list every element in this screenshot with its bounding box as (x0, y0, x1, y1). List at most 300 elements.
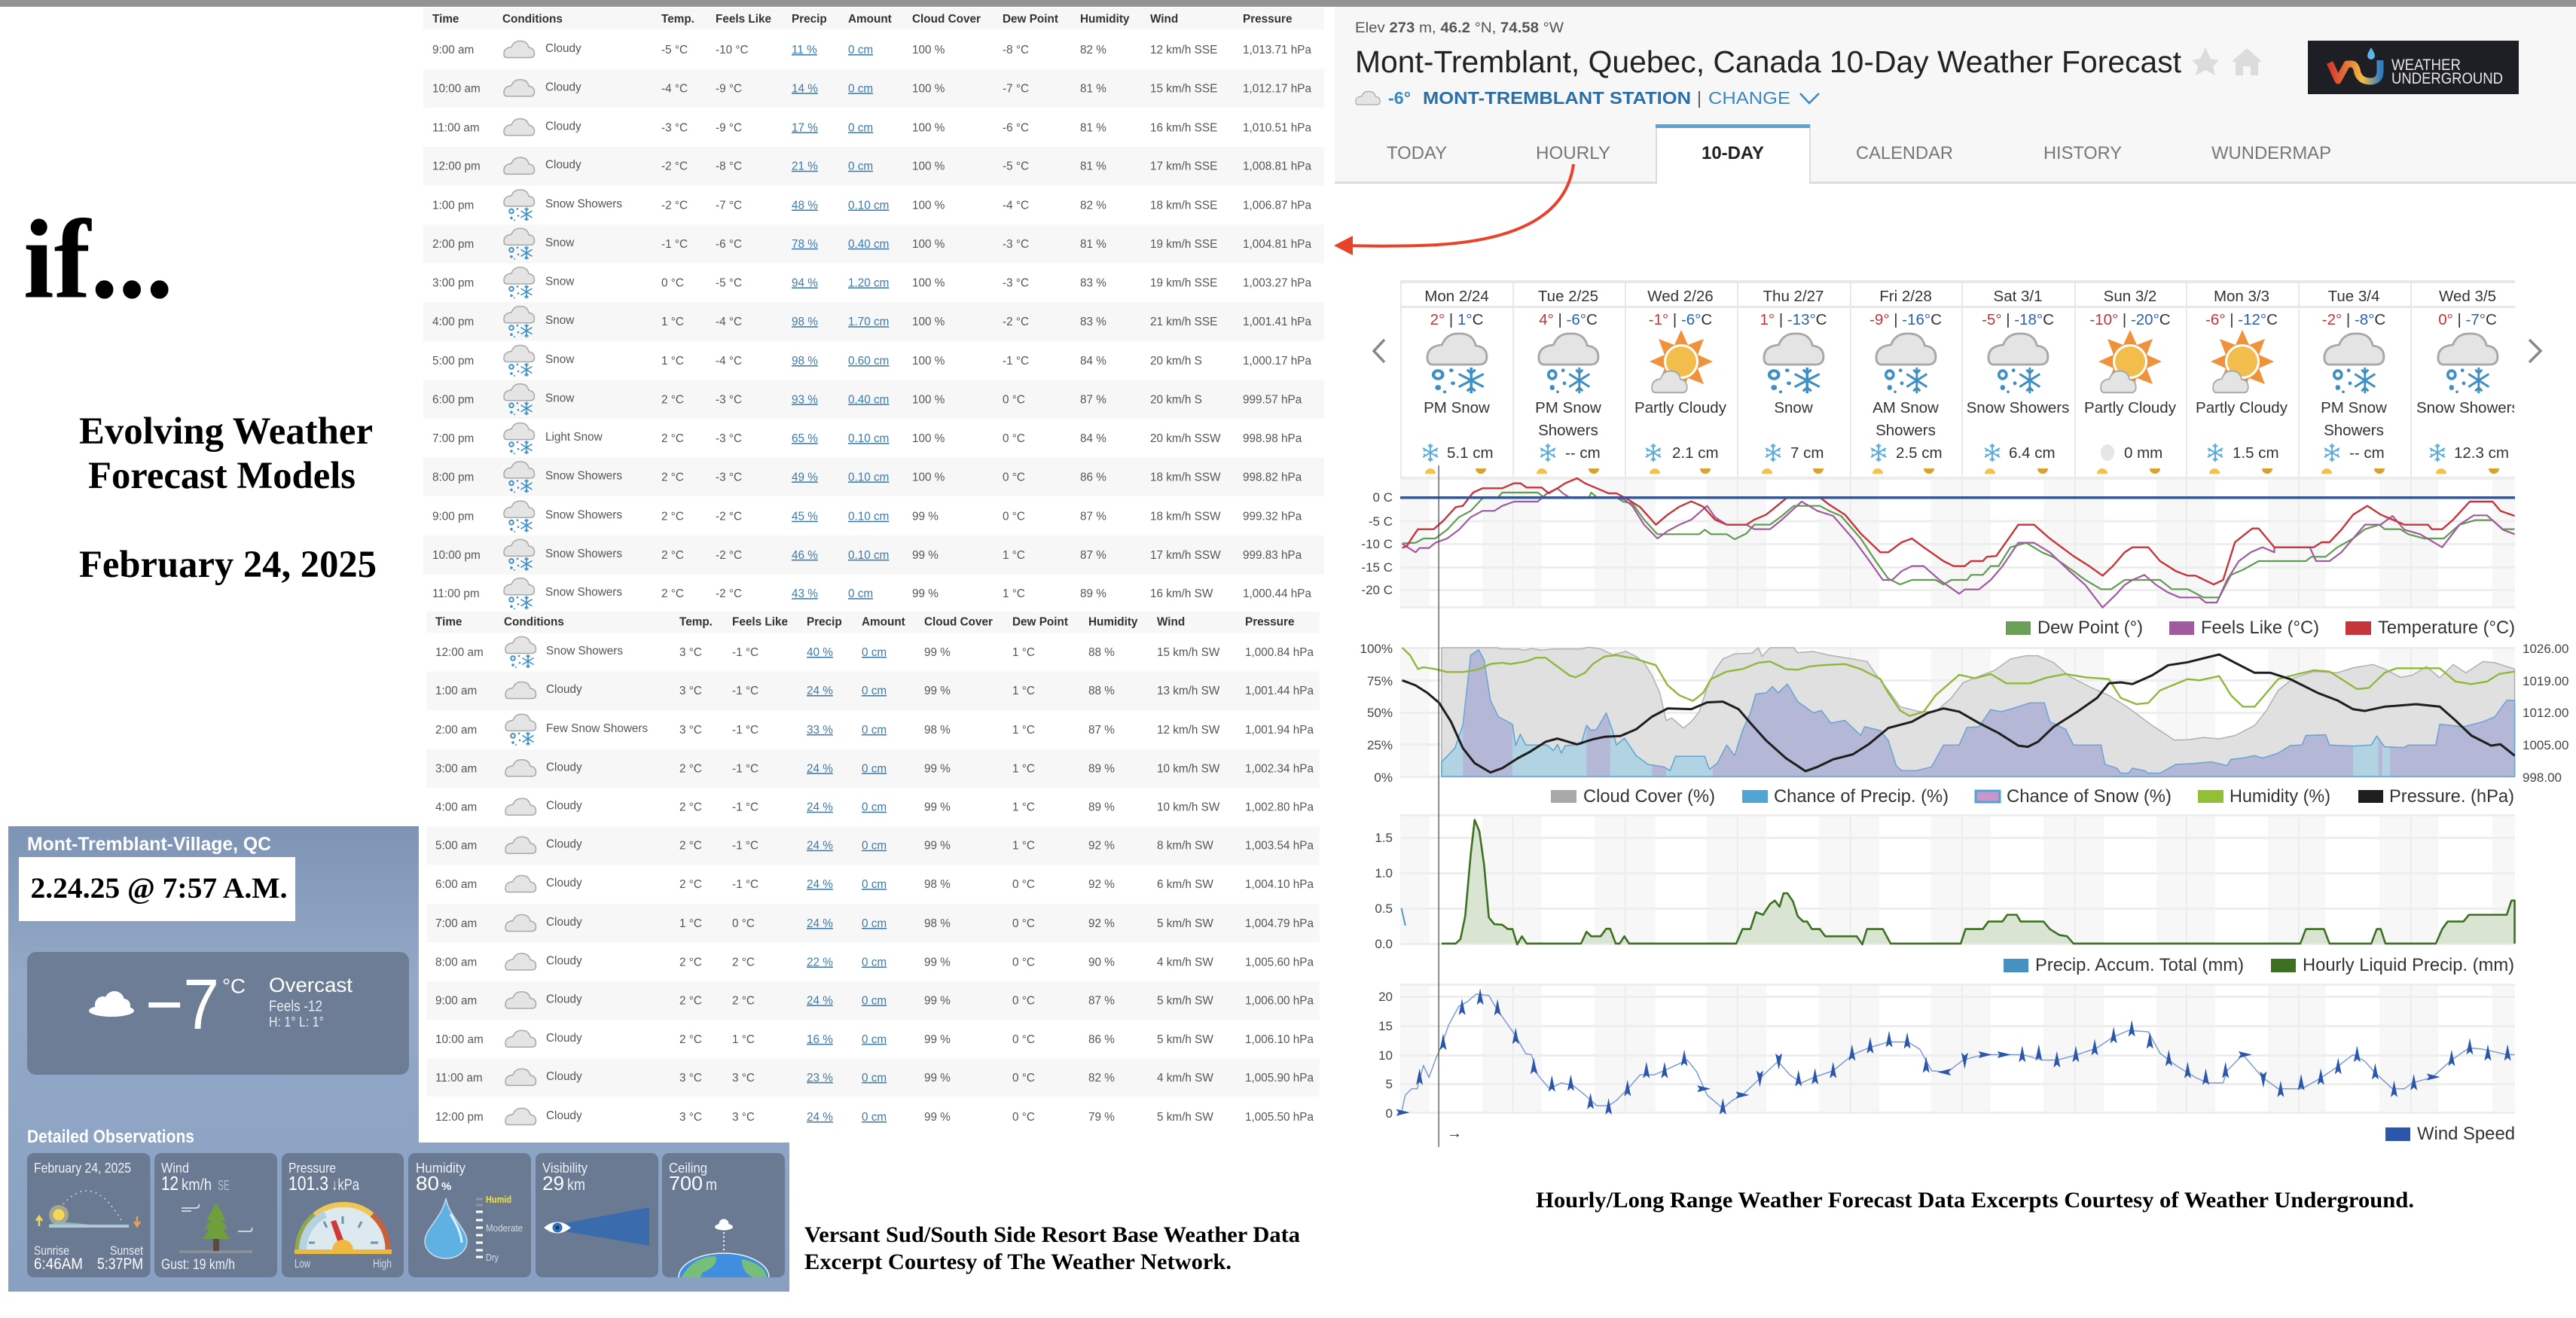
row 5:00 am: Cloudy (546, 838, 582, 851)
row 10:00 am: 0 cm (848, 82, 873, 95)
row 11:00 am: -6 °C (1003, 121, 1029, 134)
row 8:00 pm: 86 % (1080, 471, 1106, 484)
navigation tabs: TODAY (1387, 143, 1447, 163)
row 8:00 pm: 8:00 pm (432, 471, 474, 484)
legend (1551, 786, 2514, 807)
previous chevron (1374, 340, 1384, 362)
hourly table: day two (426, 612, 1320, 1125)
row 11:00 pm: 0 cm (848, 587, 873, 600)
row 8:00 pm (432, 462, 1302, 493)
row 10:00 pm: 0.10 cm (848, 549, 889, 562)
day: Wed 2/26 (1634, 288, 1727, 474)
icon: small arrow: → (1447, 1125, 1462, 1142)
row 11:00 am (435, 1069, 1314, 1085)
arrow: from Hourly tab to hourly table (1334, 164, 1573, 255)
current conditions card: Overcast (269, 974, 353, 996)
row 11:00 pm: 16 km/h SW (1150, 587, 1213, 600)
row 9:00 am: -5 °C (661, 44, 688, 56)
day: Tue 3/4: -- cm (2349, 444, 2385, 462)
row 1:00 am: 1,001.44 hPa (1245, 685, 1314, 697)
day: Thu 2/27 (1760, 288, 1827, 474)
row 7:00 pm: 20 km/h SSW (1150, 432, 1221, 445)
row 12:00 pm: 79 % (1088, 1111, 1115, 1124)
row 2:00 am: Few Snow Showers (546, 722, 649, 735)
row 11:00 am: 17 % (792, 121, 818, 134)
current conditions card: H: 1° L: 1° (269, 1014, 324, 1030)
row 1:00 am: 0 cm (862, 685, 887, 697)
row 1:00 am: 24 % (807, 685, 833, 697)
day: Mon 2/24: 5.1 cm (1447, 444, 1494, 462)
row 7:00 pm: 998.98 hPa (1243, 432, 1302, 445)
row 9:00 am (435, 992, 1314, 1008)
row 2:00 pm (432, 228, 1312, 260)
y axis labels (1375, 831, 1393, 951)
card: pressure: 101.3 (288, 1172, 328, 1194)
row 11:00 pm: 2 °C (661, 587, 684, 600)
row 1:00 pm: -7 °C (716, 199, 742, 212)
zero line (1400, 496, 2515, 499)
timestamp box (19, 857, 295, 921)
current conditions card (27, 952, 409, 1075)
row 3:00 pm: 19 km/h SSE (1150, 277, 1217, 289)
current conditions card: °C (222, 975, 246, 997)
row 12:00 pm: 0 cm (862, 1111, 887, 1124)
row 11:00 am: Cloudy (546, 1070, 582, 1083)
right axis labels: 1012.00 (2523, 706, 2568, 720)
row 5:00 am: 5:00 am (435, 840, 477, 853)
row 11:00 am: 3 °C (732, 1072, 755, 1085)
timestamp box: 2.24.25 @ 7:57 A.M. (30, 871, 288, 905)
title: Evolving Weather Forecast Models: Evolving Weather (79, 410, 373, 452)
row 3:00 am: 3:00 am (435, 762, 477, 775)
card: wind: 12 (161, 1172, 179, 1194)
day: Mon 3/3 (2196, 288, 2288, 474)
row 1:00 pm: 18 km/h SSE (1150, 199, 1217, 212)
card: humidity: Dry (486, 1252, 499, 1263)
table header: Precip (792, 13, 827, 26)
day: Thu 2/27: Thu 2/27 (1763, 288, 1824, 305)
day: Tue 3/4 (2321, 288, 2387, 474)
row 4:00 pm: 21 km/h SSE (1150, 316, 1217, 328)
row 12:00 pm: 24 % (807, 1111, 833, 1124)
row 8:00 am: 0 °C (1012, 956, 1035, 969)
humidity line (1402, 648, 2515, 716)
row 2:00 pm: 81 % (1080, 238, 1106, 251)
row 10:00 am: 86 % (1088, 1033, 1115, 1046)
row 11:00 pm: 1 °C (1003, 587, 1025, 600)
row 12:00 pm: 5 km/h SW (1157, 1111, 1213, 1124)
row 10:00 pm: 999.83 hPa (1243, 549, 1302, 562)
row 9:00 pm: 18 km/h SSW (1150, 511, 1221, 523)
row 10:00 pm: 2 °C (661, 549, 684, 562)
card: humidity: 80 (416, 1172, 439, 1194)
wind speed line (1402, 994, 2515, 1112)
day: Tue 2/25: PM Snow (1535, 399, 1601, 416)
row 1:00 pm: 48 % (792, 199, 818, 212)
row 2:00 pm: 2:00 pm (432, 238, 474, 251)
day: Mon 2/24: PM Snow (1424, 399, 1490, 416)
row 6:00 pm: 100 % (912, 393, 945, 406)
legend (2004, 955, 2514, 975)
feels like line (1402, 488, 2515, 608)
row 9:00 am: 0 °C (1012, 994, 1035, 1007)
row 1:00 pm: -4 °C (1003, 199, 1029, 212)
left axis labels: 0% (1374, 770, 1393, 785)
row 3:00 am: 1,002.34 hPa (1245, 762, 1314, 775)
row 9:00 am: 0 cm (862, 994, 887, 1007)
day: Fri 2/28: -9° | -16°C (1869, 311, 1942, 328)
station line: -6° (1388, 88, 1411, 108)
y axis labels: -5 C (1369, 514, 1393, 529)
row 1:00 am: 13 km/h SW (1157, 685, 1220, 697)
row 5:00 pm: 20 km/h S (1150, 355, 1202, 368)
row 4:00 am: 0 cm (862, 801, 887, 814)
day: Fri 2/28 (1869, 288, 1943, 474)
chart: precipitation (1375, 814, 2515, 975)
day: Wed 3/5: Wed 3/5 (2439, 288, 2496, 305)
day: Wed 3/5 (2416, 288, 2520, 474)
panel: ten-day forecast strip (1374, 280, 2541, 480)
row 2:00 am: 0 cm (862, 724, 887, 737)
row 10:00 pm: 17 km/h SSW (1150, 549, 1221, 562)
chart: wind speed (1378, 984, 2515, 1144)
y axis labels (1361, 490, 1393, 597)
row 8:00 am: Cloudy (546, 954, 582, 967)
day: Sun 3/2: 0 mm (2124, 444, 2162, 462)
row 12:00 am: 12:00 am (435, 646, 484, 659)
row 11:00 pm: 1,000.44 hPa (1243, 587, 1312, 600)
row 4:00 pm: 4:00 pm (432, 316, 474, 328)
row 10:00 am: 81 % (1080, 82, 1106, 95)
row 9:00 pm: 999.32 hPa (1243, 511, 1302, 523)
row 12:00 am: 1,000.84 hPa (1245, 646, 1314, 659)
row 3:00 pm: 3:00 pm (432, 277, 474, 289)
day: Mon 2/24 (1423, 288, 1494, 474)
row 7:00 pm: 65 % (792, 432, 818, 445)
day: Tue 3/4: -2° | -8°C (2322, 311, 2385, 328)
table header: Humidity (1080, 13, 1130, 26)
next chevron (2529, 340, 2541, 362)
row 12:00 am: 99 % (924, 646, 951, 659)
day: Tue 3/4: PM Snow (2321, 399, 2387, 416)
row 7:00 am: 1 °C (679, 917, 702, 930)
legend: Pressure. (hPa) (2389, 786, 2514, 807)
row 11:00 am: 1,005.90 hPa (1245, 1072, 1314, 1085)
row 6:00 am: 6 km/h SW (1157, 878, 1213, 891)
top gray bar (0, 0, 2576, 7)
row 1:00 am: 88 % (1088, 685, 1115, 697)
row 6:00 am: 6:00 am (435, 878, 477, 891)
row 7:00 am (435, 914, 1314, 931)
day: Sun 3/2: Partly Cloudy (2084, 399, 2177, 416)
legend (2006, 618, 2515, 638)
row 10:00 pm: 99 % (912, 549, 939, 562)
row 11:00 am: -9 °C (716, 121, 742, 134)
table header: Amount (862, 616, 905, 628)
row 7:00 am: 0 °C (1012, 917, 1035, 930)
left axis labels (1360, 642, 1393, 785)
row 8:00 pm: Snow Showers (545, 469, 622, 482)
row 7:00 am: 0 cm (862, 917, 887, 930)
card: pressure (282, 1153, 404, 1277)
right axis labels: 998.00 (2523, 770, 2562, 785)
station line: | (1697, 88, 1702, 108)
row 4:00 pm: 98 % (792, 316, 818, 328)
row 6:00 am (435, 875, 1314, 892)
row 10:00 pm: 1 °C (1003, 549, 1025, 562)
row 9:00 pm: Snow Showers (545, 509, 622, 522)
row 4:00 am: 89 % (1088, 801, 1115, 814)
y axis labels: -20 C (1361, 583, 1393, 597)
row 3:00 am: 10 km/h SW (1157, 762, 1220, 775)
row 2:00 am: 33 % (807, 724, 833, 737)
right axis labels (2523, 642, 2568, 785)
row 1:00 pm: 82 % (1080, 199, 1106, 212)
card: ceiling (662, 1153, 785, 1277)
day: Tue 2/25: Showers (1538, 422, 1598, 439)
row 8:00 am: 2 °C (679, 956, 702, 969)
row 5:00 pm (432, 345, 1312, 377)
day: Wed 3/5: 12.3 cm (2454, 444, 2509, 462)
row 12:00 pm (432, 157, 1312, 174)
row 12:00 pm (435, 1108, 1314, 1125)
card: wind: SE (218, 1178, 230, 1193)
row 4:00 am: 99 % (924, 801, 951, 814)
right axis labels: 1005.00 (2523, 738, 2568, 752)
row 2:00 pm: -1 °C (661, 238, 688, 251)
row 2:00 am: 3 °C (679, 724, 702, 737)
lines in zoomed coordinates (1402, 478, 2515, 608)
row 9:00 am: 99 % (924, 994, 951, 1007)
dew point line (1402, 493, 2515, 597)
row 10:00 am: 0 cm (862, 1033, 887, 1046)
accumulated precipitation stub (1402, 908, 1406, 926)
table header: Cloud Cover (912, 13, 981, 26)
day: Mon 3/3: 1.5 cm (2233, 444, 2279, 462)
row 10:00 pm: Snow Showers (545, 548, 622, 560)
row 10:00 am: Cloudy (546, 1032, 582, 1045)
card: ceiling: m (706, 1176, 717, 1194)
row 4:00 pm: 1 °C (661, 316, 684, 328)
row 9:00 am: 100 % (912, 44, 945, 56)
row 7:00 pm: 0 °C (1003, 432, 1025, 445)
row 11:00 pm: 43 % (792, 587, 818, 600)
card: pressure: Pressure (288, 1161, 336, 1176)
row 5:00 pm: 5:00 pm (432, 355, 474, 368)
row 4:00 am: 10 km/h SW (1157, 801, 1220, 814)
row 10:00 am: 2 °C (679, 1033, 702, 1046)
row 5:00 pm: -1 °C (1003, 355, 1029, 368)
row 11:00 pm: 99 % (912, 587, 939, 600)
row 5:00 pm: Snow (545, 353, 575, 366)
row 9:00 am: 9:00 am (432, 44, 474, 56)
card: sunrise and sunset: Sunrise (34, 1243, 69, 1258)
card: visibility: 29 (542, 1172, 564, 1194)
row 1:00 pm: Snow Showers (545, 197, 622, 210)
row 7:00 am: 0 °C (732, 917, 755, 930)
row 5:00 am: -1 °C (732, 840, 758, 853)
card: humidity: % (441, 1180, 451, 1193)
hourly liquid precipitation area (1442, 820, 2515, 944)
row 9:00 pm: 9:00 pm (432, 511, 474, 523)
table header: Dew Point (1012, 616, 1068, 628)
row 3:00 am: 2 °C (679, 762, 702, 775)
temperature line (1402, 478, 2515, 584)
row 2:00 pm: -3 °C (1003, 238, 1029, 251)
row 10:00 am: 1,012.17 hPa (1243, 82, 1312, 95)
row 7:00 pm: 100 % (912, 432, 945, 445)
row 8:00 pm: 100 % (912, 471, 945, 484)
title: Evolving Weather Forecast Models (79, 410, 373, 496)
table header: Conditions (504, 616, 564, 628)
row 9:00 pm: -2 °C (716, 511, 742, 523)
row 10:00 am: 100 % (912, 82, 945, 95)
row 1:00 pm: -2 °C (661, 199, 688, 212)
navigation tabs: 10-DAY (1702, 143, 1764, 163)
card: visibility (536, 1153, 658, 1277)
row 1:00 am: Cloudy (546, 683, 582, 696)
row 12:00 pm: 3 °C (732, 1111, 755, 1124)
day: Sun 3/2: -10° | -20°C (2089, 311, 2171, 328)
table header: Time (432, 13, 459, 26)
row 5:00 pm: 84 % (1080, 355, 1106, 368)
station line: CHANGE (1708, 88, 1790, 108)
row 12:00 am: -1 °C (732, 646, 758, 659)
row 6:00 am: 1,004.10 hPa (1245, 878, 1314, 891)
legend: Humidity (%) (2230, 786, 2330, 807)
day: Tue 3/4: Showers (2324, 422, 2384, 439)
row 7:00 am: 5 km/h SW (1157, 917, 1213, 930)
row 8:00 pm: 0 °C (1003, 471, 1025, 484)
navigation tabs: CALENDAR (1856, 143, 1953, 163)
row 4:00 pm (432, 307, 1312, 337)
row 10:00 pm: 46 % (792, 549, 818, 562)
card: visibility: km (567, 1176, 585, 1194)
row 11:00 pm: Snow Showers (545, 586, 622, 599)
row 3:00 am: 1 °C (1012, 762, 1035, 775)
row 1:00 am: -1 °C (732, 685, 758, 697)
station line: MONT-TREMBLANT STATION (1423, 88, 1691, 108)
row 4:00 am: 4:00 am (435, 801, 477, 814)
card: wind: Wind (161, 1161, 189, 1176)
row 12:00 pm: 12:00 pm (432, 160, 481, 173)
row 1:00 am: 3 °C (679, 685, 702, 697)
row 9:00 am: 11 % (792, 44, 817, 56)
card: humidity: Humid (486, 1194, 511, 1205)
row 5:00 am: 92 % (1088, 840, 1115, 853)
row 1:00 pm: 0.10 cm (848, 199, 889, 212)
chart: temperature, feels like, dew point (1361, 477, 2515, 638)
row 1:00 am: 1:00 am (435, 685, 477, 697)
y axis labels (1378, 990, 1393, 1121)
row 9:00 am: 24 % (807, 994, 833, 1007)
row 10:00 am: 5 km/h SW (1157, 1033, 1213, 1046)
row 10:00 am (432, 80, 1312, 96)
row 9:00 am: 1,006.00 hPa (1245, 994, 1314, 1007)
day: Sat 3/1: Snow Showers (1967, 399, 2069, 416)
row 2:00 am: 1 °C (1012, 724, 1035, 737)
cloud cover area (1442, 647, 2515, 776)
legend: Cloud Cover (%) (1583, 786, 1715, 807)
row 2:00 am: -1 °C (732, 724, 758, 737)
logo: Weather Underground: WEATHER (2391, 56, 2461, 74)
row 1:00 pm (432, 190, 1312, 221)
row 11:00 am: 1,010.51 hPa (1243, 121, 1312, 134)
location heading: Mont-Tremblant-Village, QC (27, 834, 271, 855)
day: Tue 3/4: Tue 3/4 (2328, 288, 2379, 305)
row 5:00 am (435, 837, 1314, 853)
day: Tue 2/25: Tue 2/25 (1538, 288, 1598, 305)
row 3:00 pm: 1,003.27 hPa (1243, 277, 1312, 289)
chart: cloud cover, precipitation chance, humidity, pressure (1360, 642, 2568, 807)
row 9:00 am: 82 % (1080, 44, 1106, 56)
row 10:00 am: -7 °C (1003, 82, 1029, 95)
legend: Precip. Accum. Total (mm) (2035, 955, 2244, 975)
card: sunrise and sunset: February 24, 2025 (34, 1161, 131, 1176)
wind direction arrows (1396, 988, 2511, 1116)
card: sunrise and sunset: Sunset (110, 1243, 143, 1258)
y axis labels: 0.0 (1375, 937, 1393, 951)
caption: The Weather Network credit: Versant Sud/South Side Resort Base Weather Data (804, 1222, 1300, 1247)
date: February 24, 2025: February 24, 2025 (79, 543, 377, 585)
row 4:00 am (435, 798, 1314, 815)
table header: Dew Point (1003, 13, 1058, 26)
navigation tabs: HOURLY (1536, 143, 1610, 163)
y axis labels: 5 (1386, 1077, 1393, 1091)
row 4:00 am: 24 % (807, 801, 833, 814)
row 12:00 am: 40 % (807, 646, 833, 659)
row 12:00 pm: 0 °C (1012, 1111, 1035, 1124)
row 4:00 am: 1,002.80 hPa (1245, 801, 1314, 814)
row 7:00 pm: 84 % (1080, 432, 1106, 445)
logo: Weather Underground (2308, 41, 2519, 94)
row 11:00 am: 4 km/h SW (1157, 1072, 1213, 1085)
row 1:00 pm: 100 % (912, 199, 945, 212)
legend: Chance of Precip. (%) (1774, 786, 1949, 807)
row 11:00 am: 16 km/h SSE (1150, 121, 1217, 134)
row 9:00 am: Cloudy (545, 42, 581, 55)
table header: Amount (848, 13, 892, 26)
row 12:00 am: 3 °C (679, 646, 702, 659)
row 8:00 pm: 998.82 hPa (1243, 471, 1302, 484)
row 12:00 am: 15 km/h SW (1157, 646, 1220, 659)
left axis labels: 75% (1367, 674, 1393, 688)
day: Sat 3/1 (1967, 288, 2069, 474)
row 8:00 pm: -3 °C (716, 471, 742, 484)
row 10:00 am: 15 km/h SSE (1150, 82, 1217, 95)
row 12:00 am (435, 636, 1314, 668)
row 5:00 pm: 1,000.17 hPa (1243, 355, 1312, 368)
row 5:00 pm: 1 °C (661, 355, 684, 368)
day: Tue 2/25 (1535, 288, 1601, 474)
row 12:00 pm: -5 °C (1003, 160, 1029, 173)
day: Mon 3/3: -6° | -12°C (2205, 311, 2278, 328)
chance of snow area (1442, 650, 2515, 776)
y axis labels: 15 (1378, 1019, 1393, 1033)
row 1:00 am: 1 °C (1012, 685, 1035, 697)
row 11:00 pm: -2 °C (716, 587, 742, 600)
row 5:00 am: 24 % (807, 840, 833, 853)
day: Mon 2/24: Mon 2/24 (1424, 288, 1489, 305)
logo: Weather Underground: UNDERGROUND (2391, 70, 2503, 87)
row 9:00 pm: 87 % (1080, 511, 1106, 523)
row 12:00 pm: 3 °C (679, 1111, 702, 1124)
y axis labels: 0 C (1373, 490, 1393, 505)
day: Wed 2/26: -1° | -6°C (1649, 311, 1712, 328)
row 5:00 am: 99 % (924, 840, 951, 853)
row 11:00 am: 11:00 am (435, 1072, 483, 1085)
card: pressure: High (373, 1258, 392, 1271)
